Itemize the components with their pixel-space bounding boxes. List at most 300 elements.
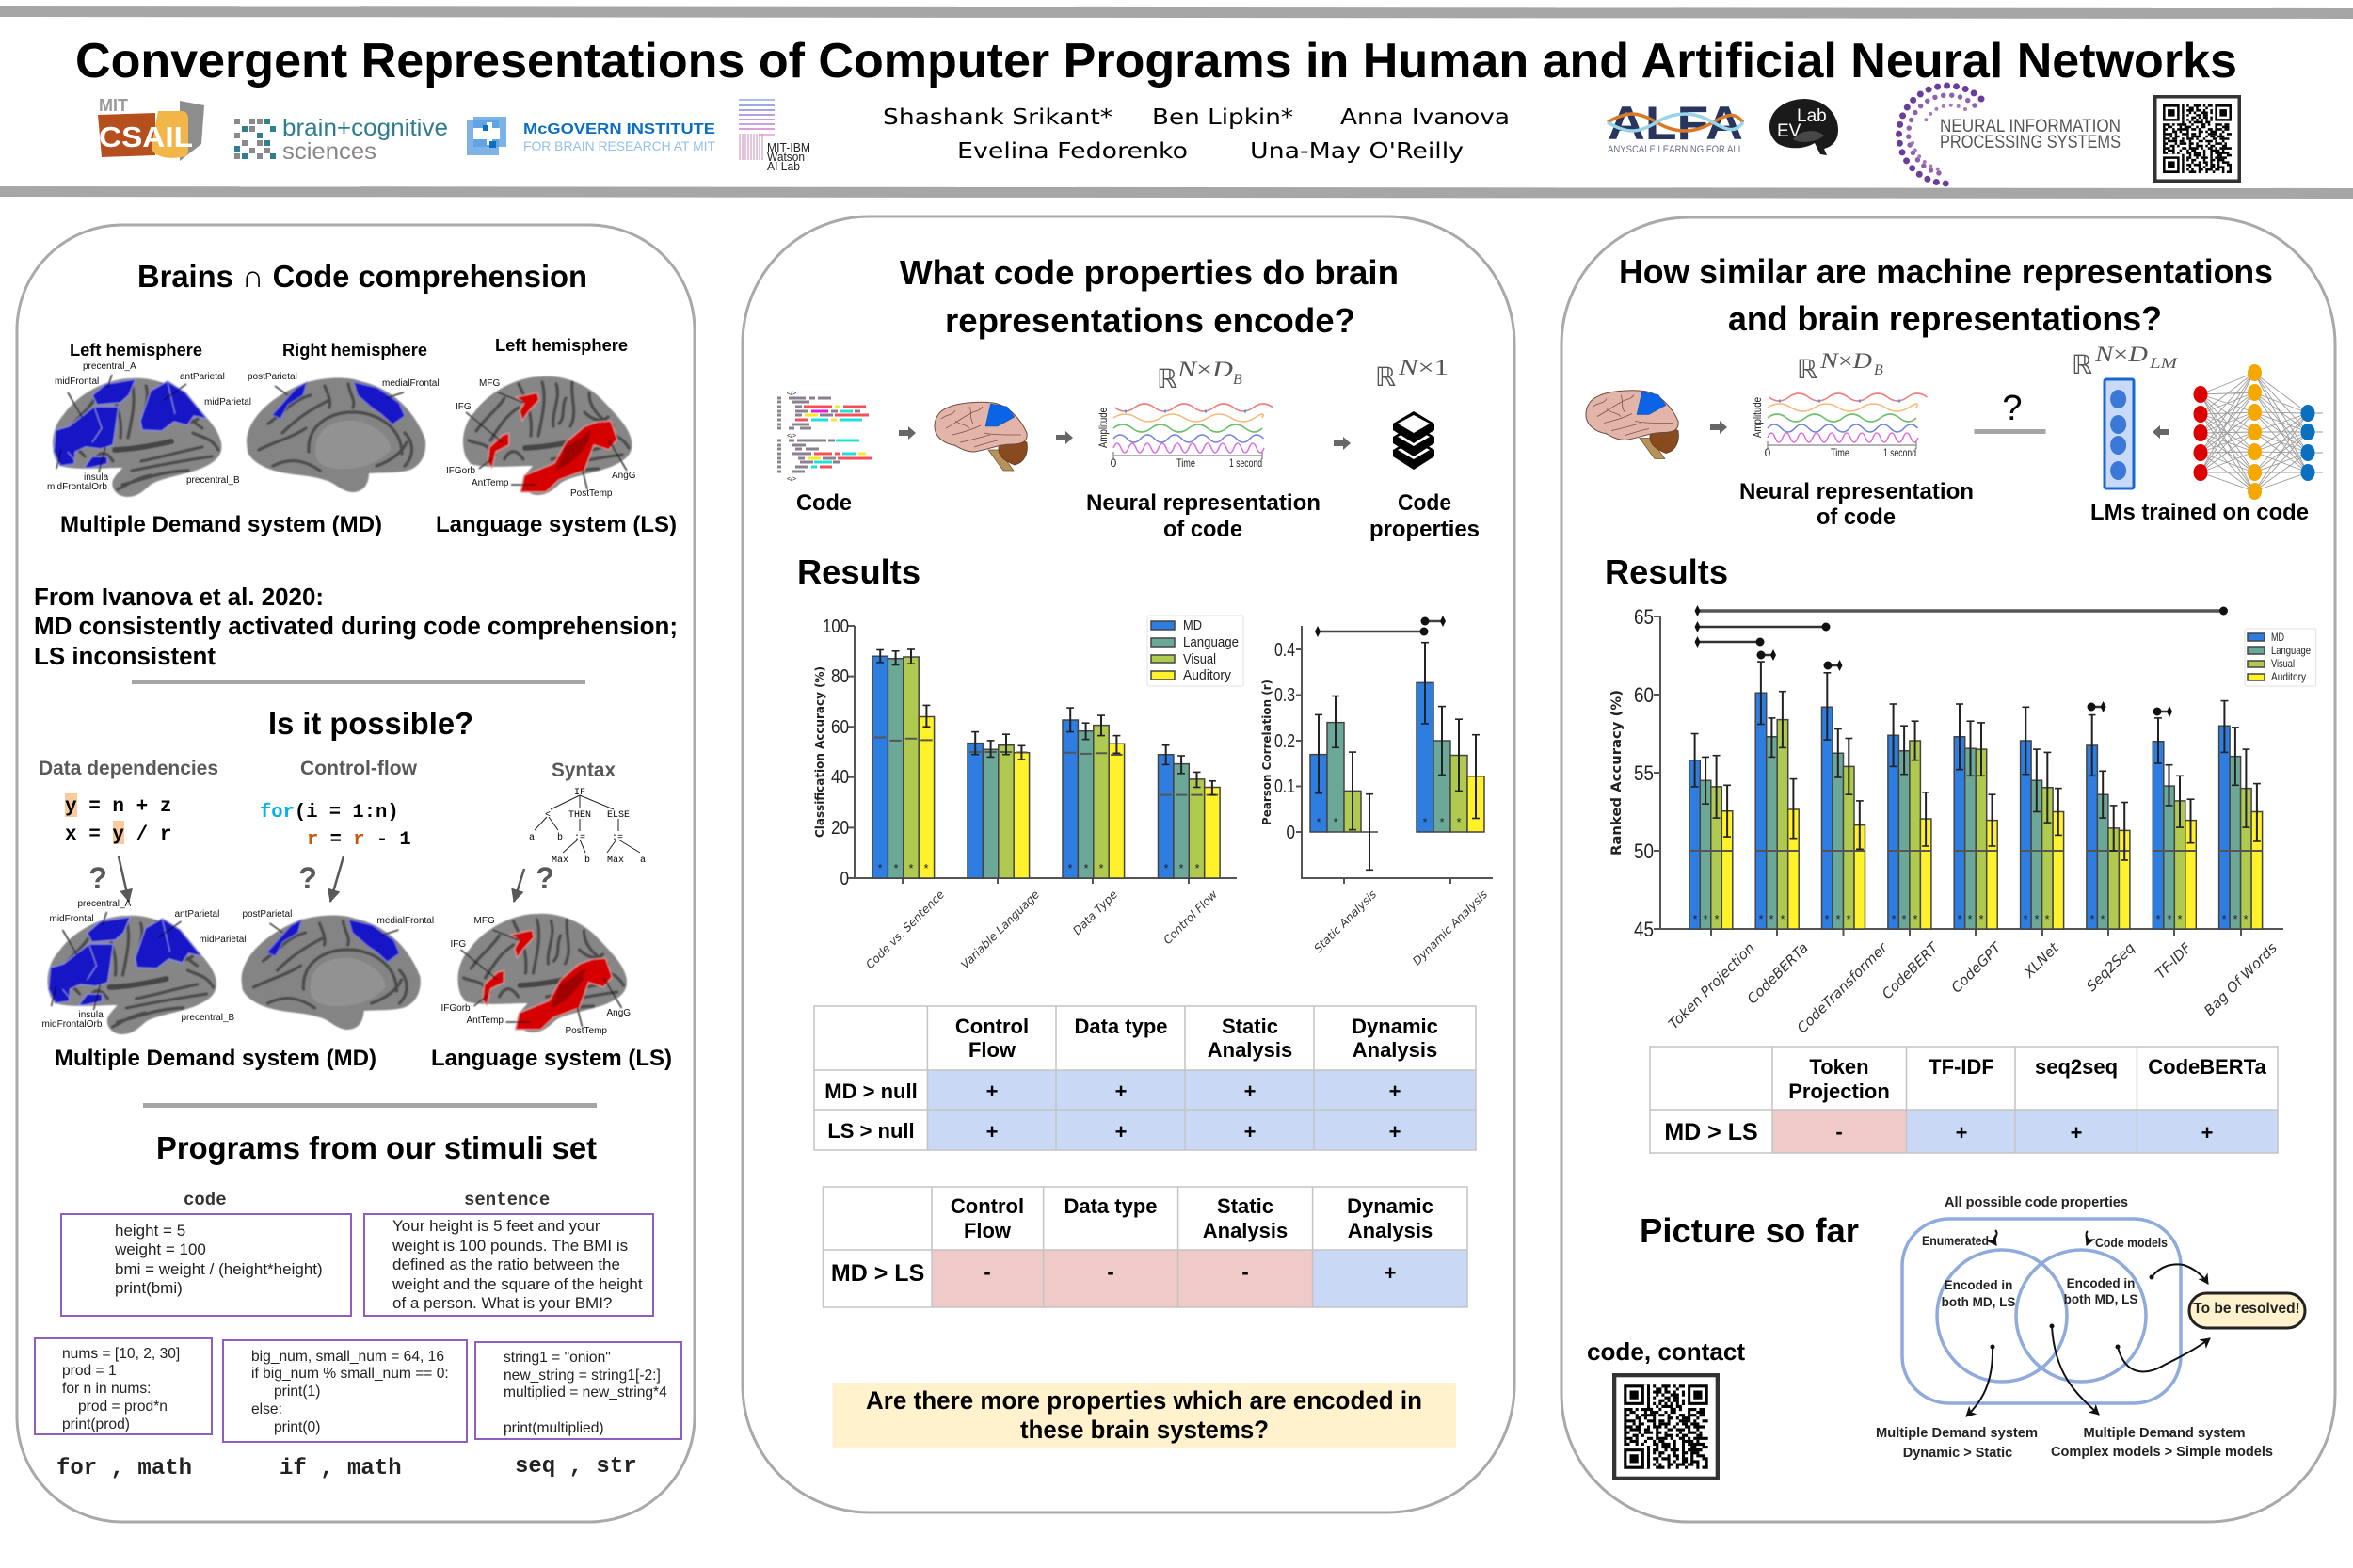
- chart: ranked accuracy by model: Seq2Seq: [2084, 940, 2138, 995]
- chart: neural waves: [1751, 393, 1928, 459]
- heading: programs from stimuli set: Programs from our stimuli set: [156, 1130, 597, 1165]
- logo: ALFA: ALFA: [1608, 97, 1743, 150]
- table: MD vs LS: Control: [951, 1194, 1024, 1218]
- chart: ranked accuracy by model: TF-IDF: [2153, 939, 2195, 983]
- chart: classification accuracy: Data Type: [1070, 888, 1120, 937]
- formula: property space: [1375, 356, 1449, 392]
- formula: model space: LM: [2149, 356, 2179, 372]
- chart: neural waves: Time: [1176, 456, 1195, 470]
- table: MD vs LS: Dynamic: [1347, 1194, 1433, 1218]
- table: MD vs LS: MD > LS: [831, 1260, 924, 1287]
- code box: for loop: print(prod): [62, 1416, 130, 1432]
- chart: neural waves: Amplitude: [1096, 408, 1110, 448]
- table: MD vs LS: Data type: [1064, 1194, 1158, 1218]
- icon: source code: [777, 391, 872, 483]
- diagram: venn of code properties: Dynamic > Static: [1903, 1446, 2012, 1461]
- sentence box: BMI problem: weight is 100 pounds. The BMI is: [392, 1237, 628, 1255]
- brain figure: language system repeat: AngG: [606, 1008, 631, 1018]
- QR code: contact: [1614, 1375, 1718, 1479]
- brain figure: MD left hemisphere: Left hemisphere: [70, 340, 202, 360]
- chart: ranked accuracy by model: CodeGPT: [1948, 939, 2006, 996]
- label: neural representation of code: Neural representation: [1739, 479, 1974, 504]
- panel: code properties in brain representations: [743, 216, 1514, 1512]
- chart: neural waves: 1 second: [1229, 456, 1262, 470]
- chart: ranked accuracy by model: CodeBERTa: [1744, 940, 1812, 1007]
- label: code properties: Code: [1398, 490, 1451, 516]
- heading: how similar: [1619, 252, 2273, 338]
- legend: brain systems: Auditory: [2271, 670, 2306, 683]
- formula: neural space: B: [1874, 362, 1883, 378]
- legend: brain systems: Language: [2271, 644, 2311, 657]
- table: brain system vs null: Dynamic: [1352, 1015, 1438, 1038]
- heading: what code properties: representations encode?: [945, 301, 1355, 340]
- chart: neural waves: 0: [1111, 456, 1117, 470]
- table: models MD vs LS: Projection: [1788, 1080, 1890, 1103]
- label: language system: Language system (LS): [436, 512, 677, 537]
- brain figure: MD right hemisphere repeat: medialFrontal: [376, 916, 434, 926]
- logo: MIT-IBM Watson AI Lab: [739, 100, 810, 173]
- diagram: venn of code properties: [1876, 1195, 2305, 1461]
- chart: neural waves: Time: [1831, 446, 1849, 459]
- icon: source code: </>: [787, 433, 796, 440]
- chart: neural waves: 1 second: [1883, 446, 1916, 459]
- code box: if statement: print(1): [274, 1384, 320, 1400]
- icon: brain: [1586, 391, 1678, 459]
- top gray bar: [0, 6, 2353, 19]
- icon: source code: </>: [787, 476, 796, 483]
- code box: string program: print(multiplied): [504, 1420, 604, 1436]
- formula: model space: [2072, 343, 2179, 380]
- code box: for loop: prod = 1: [62, 1363, 117, 1379]
- authors: Ben Lipkin*: [1152, 105, 1293, 130]
- label: neural representation of code: [1086, 490, 1321, 542]
- label: code: Code: [796, 490, 852, 516]
- chart: pearson correlation: Pearson Correlation (r): [1260, 680, 1273, 825]
- table: MD vs LS: Analysis: [1348, 1219, 1433, 1242]
- brain figure: language system repeat: IFGorb: [440, 1003, 471, 1014]
- brain figure: MD left hemisphere repeat: precentral_B: [181, 1013, 235, 1023]
- table: brain system vs null: Control: [955, 1015, 1029, 1038]
- authors: Shashank Srikant*: [883, 105, 1112, 130]
- diagram: venn of code properties: Complex models > Simple models: [2051, 1445, 2273, 1460]
- title: Convergent Representations of Computer Programs in Human and Artificial Neural Networks: [75, 34, 2237, 88]
- brain figure: language system: Left hemisphere: [495, 335, 628, 355]
- diagram: venn of code properties: Enumerated: [1922, 1234, 1989, 1248]
- text: Ivanova finding: MD consistently activated during code comprehension;: [34, 614, 678, 640]
- icon: neural network: [2193, 364, 2323, 500]
- table: brain system vs null: Analysis: [1208, 1038, 1292, 1062]
- diagram: venn of code properties: Encoded in: [1945, 1278, 2012, 1292]
- table: models MD vs LS: -: [1835, 1120, 1843, 1144]
- arrow: brain to signal: [1710, 421, 1727, 434]
- code box: BMI program: height = 5: [115, 1222, 185, 1240]
- code box: for loop: for n in nums:: [62, 1381, 151, 1397]
- logo: MIT CSAIL: [98, 96, 204, 161]
- arrow: control flow to MD: [330, 856, 344, 902]
- chart: ranked accuracy by model: 60: [1634, 683, 1654, 707]
- brain figure: language system: IFG: [456, 402, 472, 412]
- table: models MD vs LS: [1650, 1047, 2278, 1153]
- brain figure: MD right hemisphere: Right hemisphere: [282, 340, 427, 360]
- brain figure: language system repeat: MFG: [474, 916, 495, 926]
- diagram: venn of code properties: All possible code properties: [1945, 1195, 2128, 1210]
- sentence box: BMI problem: [364, 1214, 653, 1316]
- code box: BMI program: weight = 100: [114, 1240, 206, 1258]
- heading: picture so far: Picture so far: [1640, 1211, 1859, 1250]
- table: brain system vs null: Data type: [1074, 1015, 1168, 1038]
- chart: neural waves: 0: [1765, 446, 1771, 459]
- table: models MD vs LS: +++: [1956, 1121, 2213, 1144]
- label: neural representation of code: of code: [1817, 504, 1896, 530]
- legend: brain systems: MD: [2271, 631, 2284, 644]
- code box: for loop: prod = prod*n: [78, 1399, 168, 1415]
- brain figure: language system repeat: PostTemp: [565, 1026, 607, 1036]
- table: brain system vs null: MD > null: [824, 1080, 918, 1103]
- label: seq str: seq , str: [515, 1454, 637, 1480]
- column: syntax tree: ELSE: [607, 810, 630, 821]
- chart: ranked accuracy by model: [1609, 605, 2283, 1036]
- chart: classification accuracy: Code vs. Sentence: [863, 888, 947, 971]
- table: MD vs LS: ---: [984, 1260, 1249, 1284]
- column: syntax tree: Max: [607, 856, 624, 866]
- icon: source code: </>: [787, 391, 796, 397]
- logo: brain and cognitive sciences: brain+cognitive: [282, 115, 448, 141]
- heading: results: Results: [1605, 552, 1728, 591]
- icon: embedding vector: [2105, 379, 2134, 488]
- code box: string program: new_string = string1[-2:]: [504, 1368, 661, 1384]
- heading: what code properties: What code properties do brain: [900, 253, 1399, 292]
- code box: string program: [475, 1342, 681, 1439]
- logo: brain and cognitive sciences: [234, 115, 448, 165]
- chart: neural waves: [1096, 404, 1273, 470]
- label: neural representation of code: [1739, 479, 1974, 530]
- chart: ranked accuracy by model: 65: [1634, 605, 1654, 629]
- column: syntax tree: a: [640, 856, 646, 866]
- logo: MIT-IBM Watson AI Lab: AI Lab: [767, 159, 800, 173]
- lower header bar: [0, 186, 2353, 199]
- heading: how similar: How similar are machine representations: [1619, 252, 2273, 291]
- brain figure: language system repeat: AntTemp: [467, 1016, 504, 1026]
- brain figure: language system repeat: [440, 914, 631, 1036]
- brain figure: MD right hemisphere: medialFrontal: [382, 378, 440, 389]
- column: data dependencies: [39, 758, 218, 846]
- chart: classification accuracy: 40: [831, 767, 849, 788]
- chart: classification accuracy: **********: [877, 861, 1200, 875]
- brain figure: language system: MFG: [479, 378, 500, 389]
- table: brain system vs null: Analysis: [1353, 1038, 1437, 1062]
- chart: classification accuracy: Variable Language: [958, 888, 1042, 971]
- legend: brain systems: Visual: [2271, 657, 2295, 670]
- chart: neural waves: Amplitude: [1751, 397, 1764, 438]
- diagram: venn of code properties: both MD, LS: [2064, 1292, 2137, 1306]
- sentence box: BMI problem: of a person. What is your BMI?: [392, 1294, 612, 1312]
- column: data dependencies: y = n + z: [65, 796, 171, 818]
- brain figure: MD left hemisphere repeat: [41, 899, 247, 1034]
- sentence box: BMI problem: weight and the square of the height: [392, 1275, 643, 1293]
- diagram: venn of code properties: both MD, LS: [1942, 1295, 2015, 1309]
- formula: neural space: N×D: [1819, 349, 1872, 373]
- text: Ivanova finding: [34, 584, 678, 670]
- formula: neural space: ℝ: [1797, 354, 1817, 385]
- diagram: venn of code properties: Encoded in: [2067, 1276, 2135, 1290]
- label: question mark: ?: [2002, 389, 2023, 428]
- label: code properties: properties: [1369, 517, 1480, 542]
- arrow: model to vector: [2153, 425, 2169, 439]
- table: MD vs LS: Flow: [964, 1219, 1012, 1242]
- code box: BMI program: print(bmi): [115, 1279, 183, 1297]
- chart: ranked accuracy by model: 55: [1634, 761, 1654, 785]
- logo: EvLab: Lab: [1797, 106, 1827, 126]
- formula: model space: N×D: [2094, 343, 2148, 366]
- logo: MIT CSAIL: CSAIL: [99, 120, 193, 153]
- column: syntax tree: a: [529, 833, 535, 843]
- code box: if statement: print(0): [274, 1419, 320, 1435]
- question marks: ?: [536, 861, 554, 895]
- authors: Una-May O'Reilly: [1250, 139, 1464, 164]
- panel: machine versus brain representations: [1561, 217, 2335, 1522]
- diagram: venn of code properties: Code models: [2095, 1236, 2168, 1250]
- chart: pearson correlation: Dynamic Analysis: [1410, 888, 1490, 968]
- legend: brain systems: [2245, 629, 2316, 686]
- logo: McGovern Institute: [467, 117, 715, 155]
- brain figure: language system: [446, 335, 636, 499]
- logo: McGovern Institute: McGOVERN INSTITUTE: [523, 121, 715, 137]
- column: syntax tree: THEN: [568, 810, 591, 821]
- logo: NeurIPS: PROCESSING SYSTEMS: [1940, 133, 2121, 152]
- brain figure: MD right hemisphere: [247, 340, 440, 492]
- formula: neural space: B: [1233, 372, 1242, 388]
- label: neural representation of code: Neural representation: [1086, 490, 1321, 516]
- logo: MIT CSAIL: MIT: [99, 96, 128, 115]
- legend: brain systems: Language: [1183, 634, 1239, 650]
- code box: for loop: nums = [10, 2, 30]: [62, 1346, 180, 1362]
- brain figure: language system: IFGorb: [446, 466, 476, 476]
- arrow: syntax to language system: [514, 869, 524, 902]
- code box: BMI program: bmi = weight / (height*height): [115, 1260, 323, 1278]
- table: models MD vs LS: MD > LS: [1664, 1119, 1758, 1145]
- formula: model space: ℝ: [2072, 349, 2092, 380]
- heading: how similar: and brain representations?: [1728, 299, 2162, 338]
- label: for math: for , math: [56, 1456, 192, 1481]
- label: neural representation of code: of code: [1163, 517, 1242, 542]
- arrow: data dependencies to MD: [119, 856, 129, 902]
- label: multiple demand system repeat: Multiple Demand system (MD): [55, 1046, 376, 1071]
- brain figure: language system: PostTemp: [570, 488, 613, 499]
- chart: pearson correlation: Static Analysis: [1311, 888, 1379, 955]
- logo: NeurIPS: NEURAL INFORMATION: [1940, 117, 2121, 136]
- chart: classification accuracy: 60: [831, 717, 849, 738]
- chart: ranked accuracy by model: XLNet: [2021, 939, 2063, 982]
- brain figure: MD right hemisphere repeat: [241, 909, 434, 1030]
- brain figure: MD left hemisphere repeat: insula: [79, 1010, 104, 1020]
- column: data dependencies: Data dependencies: [39, 758, 218, 779]
- logo: MIT-IBM Watson AI Lab: MIT-IBM: [767, 140, 810, 154]
- label: language system repeat: Language system (LS): [431, 1046, 672, 1071]
- diagram: venn of code properties: Multiple Demand system: [1876, 1426, 2038, 1441]
- label: code, contact: code, contact: [1587, 1337, 1745, 1366]
- chart: pearson correlation: [1260, 616, 1493, 968]
- formula: neural space: [1797, 349, 1883, 385]
- heading: what code properties: [900, 253, 1399, 340]
- brain figure: MD left hemisphere: midParietal: [204, 397, 251, 408]
- authors: Evelina Fedorenko: [957, 139, 1188, 164]
- column: syntax tree: :=: [612, 833, 623, 843]
- chart: classification accuracy: 0: [840, 869, 849, 889]
- code box: if statement: [223, 1340, 467, 1442]
- chart: classification accuracy: 20: [831, 818, 849, 839]
- brain figure: MD left hemisphere: antParietal: [180, 372, 225, 382]
- legend: brain systems: MD: [1183, 617, 1202, 633]
- table: brain system vs null: Flow: [968, 1038, 1016, 1062]
- question marks: [88, 861, 554, 895]
- column: syntax tree: Max: [552, 856, 568, 866]
- logo: McGovern Institute: FOR BRAIN RESEARCH AT MIT: [523, 138, 715, 153]
- chart: ranked accuracy by model: CodeBERT: [1880, 939, 1943, 1002]
- code box: if statement: if big_num % small_num == 0:: [251, 1366, 449, 1382]
- formula: neural space: [1157, 358, 1242, 394]
- chart: classification accuracy: [813, 616, 1237, 971]
- question marks: ?: [88, 861, 107, 895]
- arrow: brain to neural signal: [1056, 431, 1073, 444]
- legend: brain systems: [1147, 616, 1243, 686]
- table: MD vs LS: [823, 1187, 1467, 1307]
- column: syntax tree: b: [584, 855, 590, 866]
- chart: pearson correlation: 0.4: [1274, 640, 1295, 661]
- logo: EvLab: EV: [1777, 121, 1801, 141]
- heading: is it possible: Is it possible?: [268, 706, 473, 741]
- brain figure: MD left hemisphere: midFrontal: [55, 376, 99, 387]
- logo: NeurIPS: [1899, 86, 2121, 184]
- chart: ranked accuracy by model: 50: [1634, 840, 1654, 863]
- text: Ivanova finding: From Ivanova et al. 2020:: [34, 584, 324, 611]
- logo: MIT-IBM Watson AI Lab: Watson: [767, 150, 805, 164]
- heading: results: Results: [797, 552, 920, 591]
- icon: stacked layers: [1393, 411, 1434, 470]
- label: if math: if , math: [280, 1456, 402, 1481]
- authors: [883, 105, 1510, 164]
- brain figure: MD left hemisphere: precentral_A: [83, 361, 136, 372]
- diagram: venn of code properties: Multiple Demand system: [2084, 1426, 2246, 1441]
- label: code properties: [1369, 490, 1480, 542]
- brain figure: language system: AntTemp: [472, 478, 509, 488]
- brain figure: MD right hemisphere repeat: postParietal: [243, 909, 292, 920]
- code box: string program: string1 = "onion": [504, 1350, 611, 1366]
- table: brain system vs null: [814, 1006, 1476, 1150]
- logo: brain and cognitive sciences: sciences: [282, 138, 376, 165]
- label: code column: code: [184, 1190, 227, 1210]
- column: syntax tree: Syntax: [552, 760, 616, 781]
- table: models MD vs LS: TF-IDF: [1929, 1055, 1994, 1079]
- diagram: venn of code properties: To be resolved!: [2193, 1301, 2300, 1317]
- column: syntax tree: IF: [574, 788, 585, 798]
- column: syntax tree: b: [557, 832, 563, 843]
- column: data dependencies: x = y / r: [65, 824, 171, 846]
- brain figure: MD left hemisphere: insula: [84, 472, 109, 483]
- chart: pearson correlation: *****: [1316, 815, 1462, 829]
- code box: for loop: [35, 1338, 212, 1434]
- arrow: code to brain: [899, 426, 916, 440]
- brain figure: MD left hemisphere repeat: midFrontal: [49, 914, 94, 924]
- formula: property space: ℝ: [1375, 361, 1396, 392]
- heading: brains code comprehension: Brains ∩ Code comprehension: [137, 259, 587, 294]
- chart: pearson correlation: 0.1: [1274, 776, 1295, 797]
- brain figure: MD left hemisphere: [47, 340, 251, 497]
- chart: pearson correlation: 0.2: [1274, 731, 1295, 752]
- column: control flow: Control-flow: [300, 758, 418, 779]
- column: syntax tree: :=: [574, 833, 585, 843]
- label: LMs trained on code: LMs trained on code: [2090, 500, 2309, 525]
- chart: classification accuracy: 80: [831, 666, 849, 687]
- chart: ranked accuracy by model: Token Projection: [1666, 940, 1758, 1032]
- table: MD vs LS: Static: [1217, 1194, 1273, 1218]
- column: syntax tree: <: [545, 810, 551, 821]
- label: multiple demand system: Multiple Demand system (MD): [60, 512, 382, 537]
- column: control flow: [260, 758, 418, 851]
- chart: pearson correlation: 0: [1286, 823, 1295, 843]
- sentence box: BMI problem: Your height is 5 feet and your: [392, 1217, 600, 1235]
- chart: pearson correlation: 0.3: [1274, 685, 1295, 706]
- QR code: header: [2155, 97, 2239, 181]
- chart: ranked accuracy by model: Bag Of Words: [2201, 940, 2281, 1019]
- callout: open question: Are there more properties which are encoded in: [866, 1386, 1422, 1415]
- icon: brain: [935, 402, 1027, 471]
- table: models MD vs LS: Token: [1809, 1055, 1869, 1079]
- brain figure: language system repeat: IFG: [450, 939, 466, 950]
- brain figure: MD left hemisphere: precentral_B: [186, 475, 240, 486]
- table: models MD vs LS: CodeBERTa: [2148, 1055, 2267, 1079]
- brain figure: MD left hemisphere repeat: precentral_A: [77, 899, 132, 909]
- callout: open question: these brain systems?: [1020, 1416, 1269, 1444]
- logo: ALFA: ANYSCALE LEARNING FOR ALL: [1608, 144, 1743, 155]
- chart: classification accuracy: 100: [823, 616, 849, 637]
- table: models MD vs LS: seq2seq: [2035, 1055, 2118, 1079]
- table: brain system vs null: LS > null: [827, 1119, 915, 1143]
- formula: neural space: N×D: [1176, 358, 1233, 381]
- chart: classification accuracy: Classification Accuracy (%): [813, 666, 826, 838]
- brain figure: MD left hemisphere repeat: midFrontalOrb: [41, 1019, 103, 1030]
- question marks: ?: [298, 861, 317, 895]
- column: syntax tree: [529, 760, 646, 866]
- table: brain system vs null: ++++: [986, 1120, 1401, 1144]
- legend: brain systems: Auditory: [1183, 667, 1231, 683]
- code box: if statement: else:: [251, 1401, 282, 1417]
- sentence box: BMI problem: defined as the ratio between the: [392, 1256, 620, 1273]
- chart: ranked accuracy by model: Ranked Accuracy (%): [1609, 690, 1625, 856]
- chart: ranked accuracy by model: CodeTransformer: [1794, 939, 1891, 1036]
- authors: Anna Ivanova: [1340, 105, 1510, 130]
- brain figure: MD right hemisphere: postParietal: [248, 372, 297, 382]
- table: MD vs LS: +: [1385, 1261, 1396, 1285]
- chart: ranked accuracy by model: **************************: [1692, 912, 2249, 926]
- brain figure: MD left hemisphere: midFrontalOrb: [47, 482, 107, 492]
- legend: brain systems: Visual: [1183, 651, 1216, 667]
- formula: neural space: ℝ: [1157, 363, 1177, 394]
- callout: open question: [832, 1383, 1456, 1448]
- brain figure: MD left hemisphere repeat: midParietal: [200, 935, 247, 945]
- brain figure: language system: AngG: [612, 471, 636, 481]
- formula: property space: N×1: [1398, 356, 1449, 379]
- code box: if statement: big_num, small_num = 64, 16: [251, 1349, 444, 1365]
- column: control flow: r = r - 1: [307, 829, 411, 851]
- label: sentence column: sentence: [464, 1190, 550, 1210]
- column: control flow: for(i = 1:n): [260, 802, 399, 824]
- code box: string program: multiplied = new_string*4: [504, 1384, 667, 1400]
- table: MD vs LS: Analysis: [1203, 1219, 1288, 1242]
- code box: BMI program: [61, 1214, 351, 1316]
- chart: classification accuracy: Control Flow: [1160, 888, 1220, 947]
- text: Ivanova finding: LS inconsistent: [34, 644, 216, 670]
- table: brain system vs null: Static: [1222, 1015, 1278, 1038]
